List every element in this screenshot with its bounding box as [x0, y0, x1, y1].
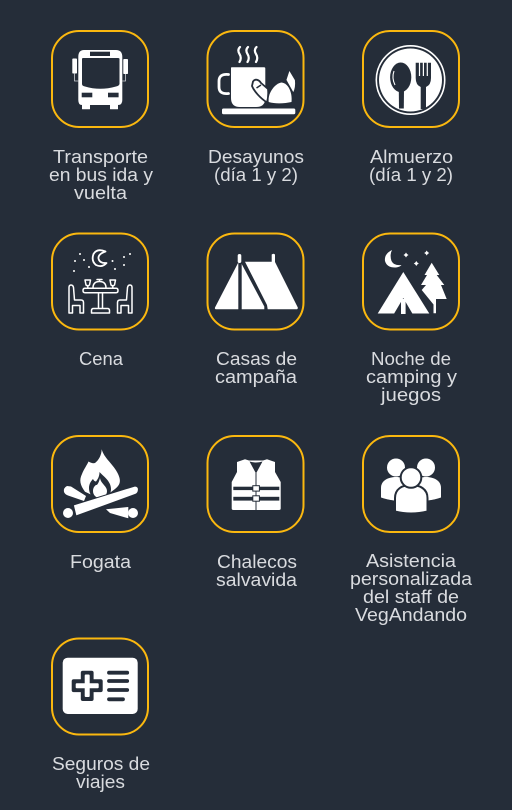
icon: campfire — [63, 449, 138, 518]
label: casas de campaña — [215, 348, 298, 387]
label: seguros de viajes: Seguros de — [52, 753, 150, 774]
label: chalecos salvavida: salvavida — [216, 569, 298, 590]
label: asistencia — [350, 550, 473, 625]
frame: almuerzo — [363, 31, 459, 127]
panel: transporte — [49, 31, 154, 203]
panel: almuerzo — [363, 31, 459, 185]
panel: noche de camping — [363, 234, 459, 405]
label: cena: Cena — [79, 348, 124, 369]
icon: medical card — [63, 658, 138, 714]
panel: fogata — [52, 436, 148, 572]
label: noche de camping: camping y — [366, 366, 458, 387]
label: noche de camping — [366, 348, 458, 405]
frame: fogata — [52, 436, 148, 532]
panel: casas de campaña — [208, 234, 304, 387]
label: transporte: Transporte — [53, 146, 148, 167]
label: asistencia: Asistencia — [366, 550, 457, 571]
label: asistencia: VegAndando — [355, 604, 467, 625]
icon: bus — [72, 50, 128, 109]
frame: seguros de viajes — [52, 638, 148, 734]
label: almuerzo — [369, 146, 453, 185]
label: transporte: vuelta — [74, 182, 128, 203]
label: almuerzo: Almuerzo — [370, 146, 453, 167]
label: almuerzo: (día 1 y 2) — [369, 164, 453, 185]
label: transporte — [49, 146, 154, 203]
frame: cena — [52, 234, 148, 330]
frame: noche de camping — [363, 234, 459, 330]
icon: plate with spoon and fork — [376, 46, 445, 114]
label: chalecos salvavida: Chalecos — [217, 551, 297, 572]
icon: life vest — [232, 459, 281, 510]
label: asistencia: del staff de — [363, 586, 459, 607]
panel: chalecos salvavida — [208, 436, 304, 590]
frame: desayunos — [208, 31, 304, 127]
label: fogata: Fogata — [70, 551, 132, 572]
frame: asistencia — [363, 436, 459, 532]
panel: seguros de viajes — [52, 638, 150, 792]
panel: cena — [52, 234, 148, 369]
label: casas de campaña: campaña — [215, 366, 298, 387]
frame: casas de campaña — [208, 234, 304, 330]
label: transporte: en bus ida y — [49, 164, 154, 185]
label: desayunos — [208, 146, 304, 185]
label: chalecos salvavida — [216, 551, 298, 590]
label: asistencia: personalizada — [350, 568, 473, 589]
label: casas de campaña: Casas de — [216, 348, 297, 369]
icon: group of people — [381, 458, 441, 513]
label: seguros de viajes: viajes — [76, 771, 125, 792]
icon: tents — [215, 254, 298, 309]
panel: desayunos — [208, 31, 304, 185]
icon: camp tent, tree, moon and stars — [375, 250, 447, 315]
panel: asistencia — [350, 436, 473, 625]
label: desayunos: Desayunos — [208, 146, 304, 167]
label: noche de camping: Noche de — [371, 348, 451, 369]
label: seguros de viajes — [52, 753, 150, 792]
frame: transporte — [52, 31, 148, 127]
icon: coffee and croissant — [219, 47, 296, 114]
label: noche de camping: juegos — [380, 384, 441, 405]
frame: chalecos salvavida — [208, 436, 304, 532]
icon: dinner table under moon — [69, 250, 132, 313]
label: desayunos: (día 1 y 2) — [214, 164, 298, 185]
